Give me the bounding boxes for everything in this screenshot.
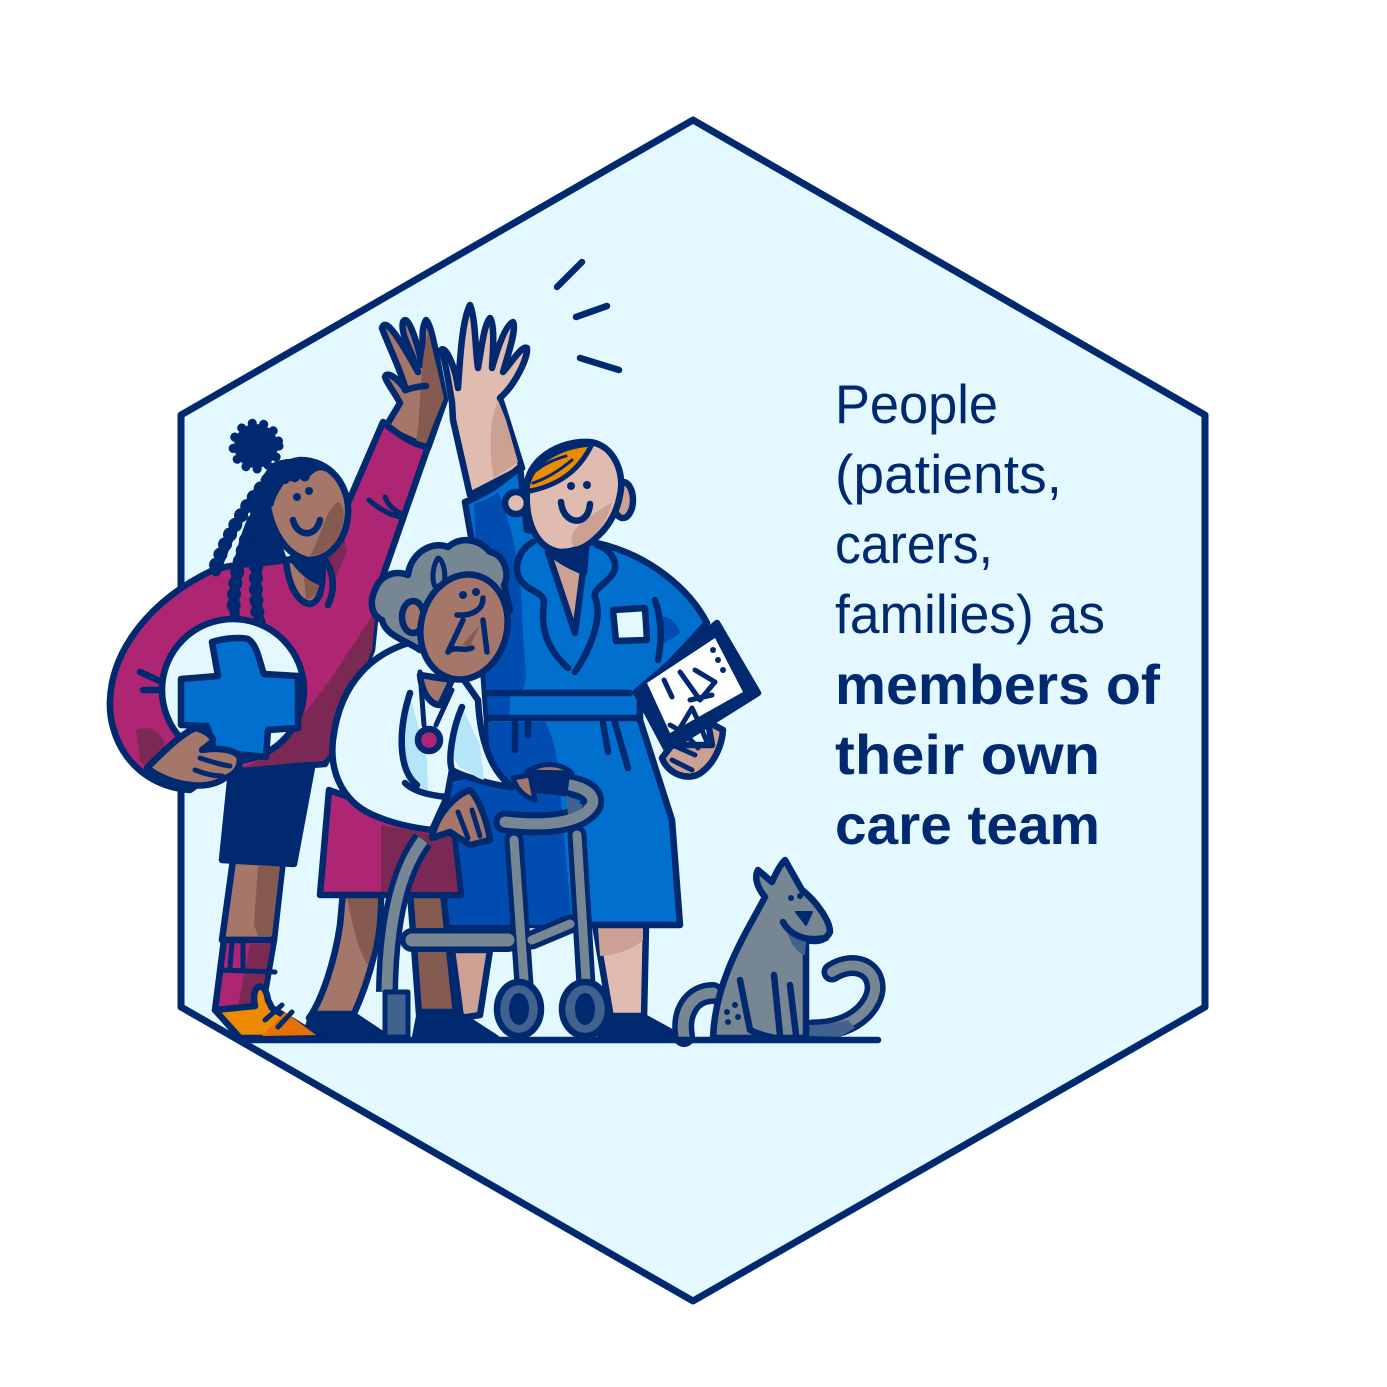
- hand on handle: [513, 765, 572, 800]
- wheels: [497, 982, 608, 1036]
- raised hand: [382, 320, 445, 448]
- ear: [402, 601, 424, 633]
- nurse shoe: [600, 1016, 682, 1038]
- text: lead-in: People: [835, 373, 998, 435]
- pink jumper: [110, 422, 428, 790]
- text: lead-in: [835, 373, 1105, 645]
- legs and sock: [215, 860, 283, 1010]
- text: lead-in: carers,: [835, 513, 993, 575]
- grey curly hair: [372, 540, 510, 650]
- pink skirt: [320, 790, 461, 895]
- figure: nurse: [441, 305, 758, 1038]
- figure: older woman: [305, 540, 519, 1038]
- dog body: [713, 860, 830, 1038]
- hair and braids: [216, 423, 325, 628]
- nurse legs: [452, 925, 646, 1018]
- text: lead-in: (patients,: [835, 443, 1062, 505]
- head: [268, 460, 348, 560]
- figure: woman with ball: [110, 320, 445, 1010]
- dog tail and rear foot: [683, 966, 875, 1037]
- text: emphasis: care team: [835, 793, 1100, 856]
- dog: [683, 860, 875, 1038]
- hair mass behind head: [245, 478, 285, 562]
- medical cross ball: [162, 619, 304, 761]
- hand on frame: [432, 790, 490, 845]
- necklace: [418, 672, 452, 751]
- navy shorts: [222, 762, 313, 864]
- navy shoes: [305, 1012, 496, 1038]
- nurse head: [527, 442, 621, 552]
- orange shoe: [215, 987, 320, 1038]
- frame outline: [387, 782, 593, 992]
- raised hand and arm: [441, 305, 527, 495]
- head: [409, 565, 519, 689]
- frame grey tubes: [387, 785, 593, 992]
- nurse hand on tablet: [662, 708, 723, 777]
- rubber foot: [385, 992, 408, 1037]
- text: emphasis: their own: [835, 723, 1100, 786]
- neck: [286, 558, 323, 604]
- text: emphasis: [835, 653, 1160, 856]
- inner handle shade: [566, 795, 583, 815]
- hexagon panel: [181, 120, 1205, 1301]
- walking frame: [385, 765, 608, 1037]
- motion marks: [557, 262, 619, 370]
- blue uniform: [445, 467, 707, 925]
- white cardigan: [332, 640, 512, 830]
- hand on ball: [147, 728, 240, 785]
- tablet: [636, 623, 758, 750]
- text: lead-in: families) as: [835, 583, 1105, 645]
- nurse ears: [505, 482, 633, 518]
- text: emphasis: members of: [835, 653, 1160, 716]
- illustration: care team: [110, 262, 878, 1040]
- caption text: [835, 373, 1160, 856]
- ground line: [250, 1037, 878, 1043]
- nurse collar and neck: [517, 542, 615, 672]
- legs: [309, 892, 456, 1018]
